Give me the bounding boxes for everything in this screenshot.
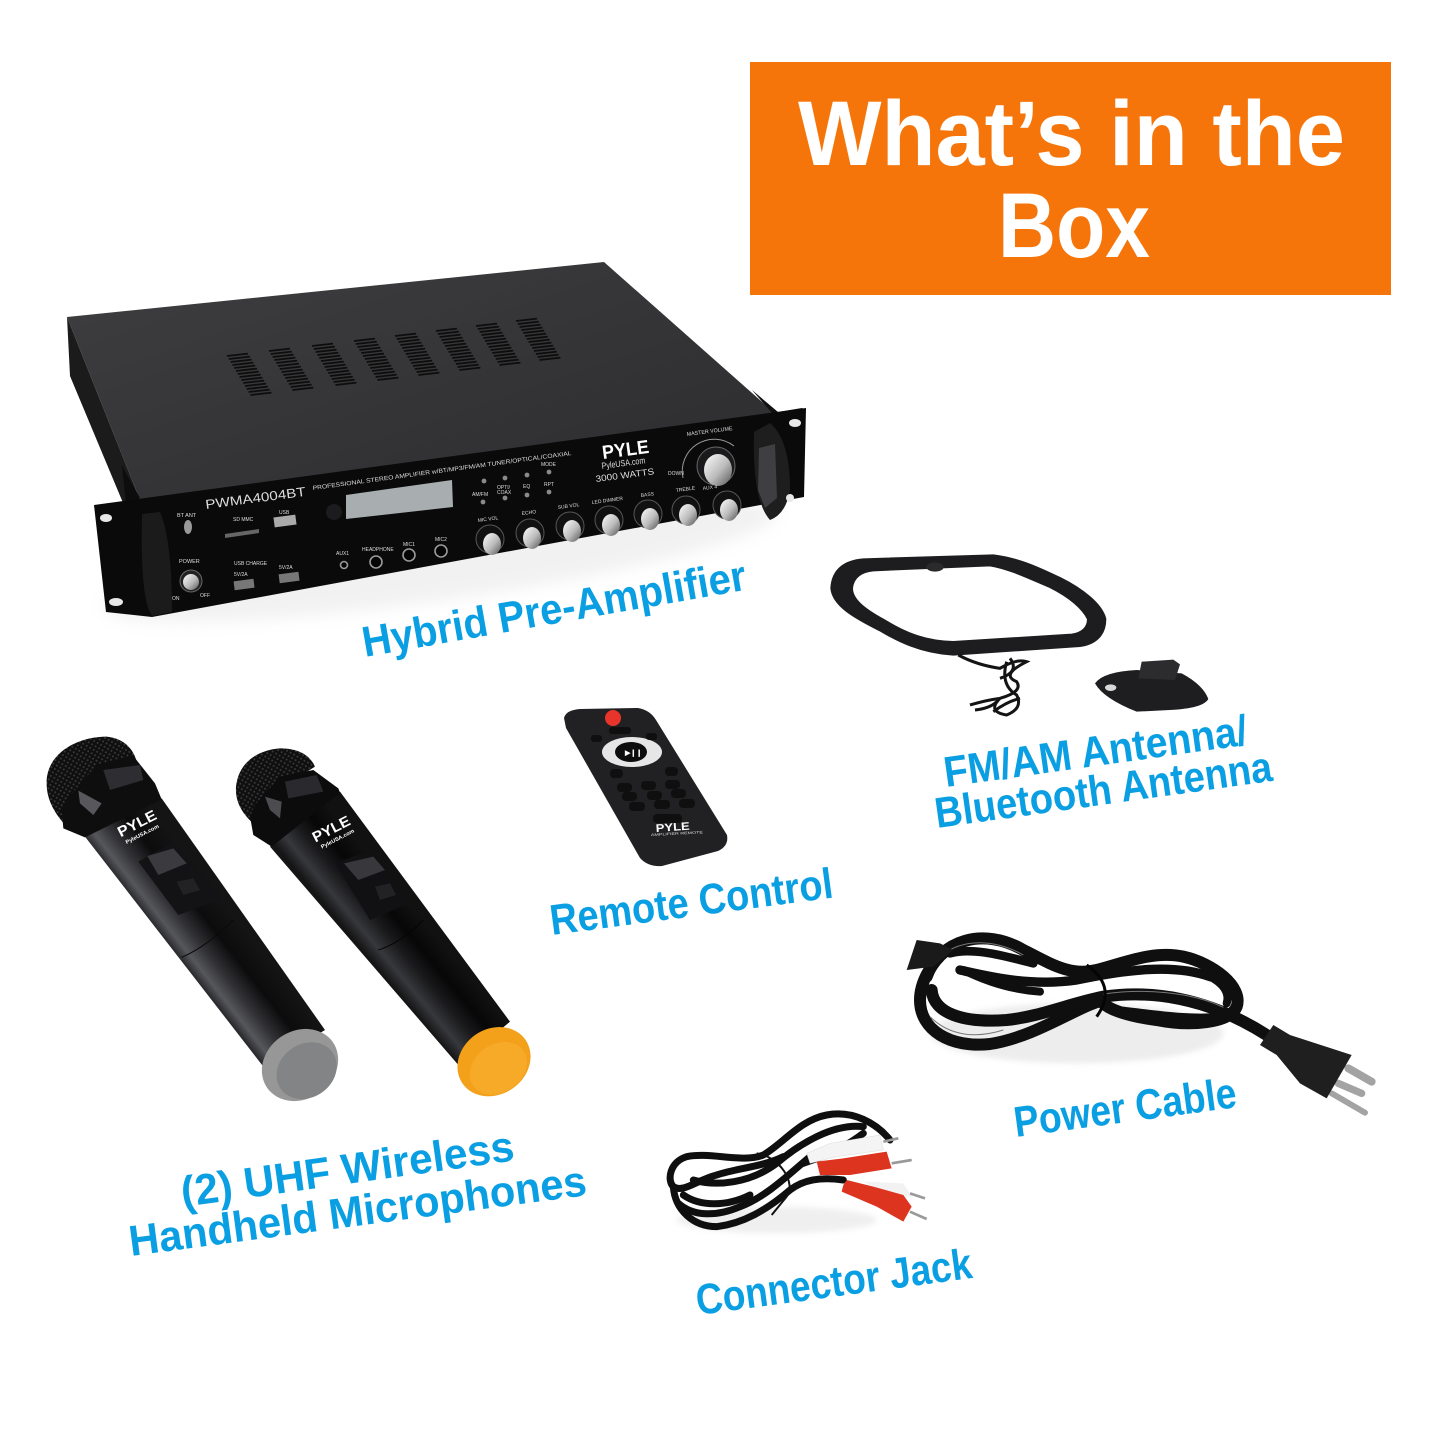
top vents (227, 319, 560, 395)
cable tie (1087, 965, 1105, 1017)
brand block (595, 437, 655, 484)
white plugs (807, 1135, 925, 1198)
power switch (172, 559, 210, 602)
mode buttons: EQ (523, 484, 530, 490)
usb and sd ports: SD MMC (233, 517, 254, 523)
mic logo: PyleUSA.com (320, 828, 356, 850)
female connector (907, 940, 953, 970)
master volume knob: MASTER VOLUME (686, 426, 733, 438)
knob labels: ECHO (521, 509, 537, 517)
remote logo (651, 821, 704, 837)
label: antenna: FM/AM Antenna/ (941, 707, 1250, 797)
antenna clip (926, 562, 944, 572)
title text (798, 83, 1345, 277)
power button (605, 710, 621, 726)
label: antenna: Bluetooth Antenna (932, 743, 1276, 838)
title text: Box (998, 175, 1150, 277)
cable highlights (930, 943, 1223, 1035)
title banner (750, 62, 1391, 295)
usb and sd ports (225, 510, 300, 590)
input jacks (336, 537, 447, 568)
front panel (94, 408, 806, 617)
mode buttons: AM/FM (472, 492, 488, 498)
mode buttons: MODE (541, 462, 557, 468)
knob labels: TREBLE (675, 485, 696, 494)
power switch: POWER (179, 559, 200, 565)
brand block: PyleUSA.com (601, 455, 646, 471)
label: remote: Remote Control (547, 860, 836, 945)
IR sensor (326, 504, 342, 520)
red plugs (817, 1152, 927, 1222)
mic seam (378, 920, 423, 950)
knob labels: MIC VOL (477, 515, 499, 524)
title text: What’s in the (798, 83, 1345, 185)
mic logo: PYLE (115, 808, 160, 841)
cable tie (757, 1153, 790, 1215)
brand block: 3000 WATTS (595, 466, 655, 484)
knob labels: BASS (640, 491, 655, 499)
rack handles (142, 423, 790, 616)
mic grille (47, 737, 137, 827)
input jacks: HEADPHONE (362, 547, 394, 553)
usb and sd ports: 5V/2A (234, 572, 248, 578)
model name: PWMA4004BT (204, 484, 307, 512)
mode buttons (472, 462, 557, 504)
usb and sd ports: USB (279, 510, 290, 516)
power cable (907, 938, 1372, 1113)
label: microphones: Handheld Microphones (126, 1157, 589, 1266)
brand block: PYLE (601, 437, 650, 464)
tone knobs (476, 491, 741, 555)
connector jack (670, 1114, 927, 1233)
remote logo: AMPLIFIER REMOTE (651, 830, 704, 837)
antenna loop (832, 556, 1105, 654)
label: connector jack: Connector Jack (693, 1240, 975, 1325)
mic switch (138, 842, 223, 915)
rca cable coils (670, 1114, 890, 1227)
label: microphones: (2) UHF Wireless (178, 1123, 517, 1217)
remote body (564, 708, 727, 866)
mic switch (335, 850, 408, 920)
nav ring: ▶❙❙ (624, 749, 642, 757)
mode buttons: OPTI/ (497, 485, 511, 491)
usb and sd ports: USB CHARGE (234, 561, 268, 567)
mic logo: PyleUSA.com (125, 824, 160, 846)
amplifier chassis (67, 262, 806, 510)
mic collar (250, 770, 340, 847)
mic grip (270, 792, 510, 1065)
mic collar (62, 756, 162, 837)
mode buttons: RPT (544, 482, 554, 488)
plug prongs (1332, 1068, 1372, 1113)
amplifier (67, 262, 806, 647)
bluetooth antenna port (177, 513, 197, 534)
antenna wire (958, 655, 1027, 715)
rack ear holes (100, 419, 801, 606)
power switch: ON (172, 596, 180, 602)
cable coils (920, 938, 1267, 1045)
description: PROFESSIONAL STEREO AMPLIFIER w/BT/MP3/FM/AM TUNER/OPTICAL/COAXIAL (312, 451, 573, 492)
knob labels: LED DIMMER (591, 496, 624, 506)
mic end cap (444, 1013, 544, 1110)
label: pre-amplifier: Hybrid Pre-Amplifier (358, 552, 750, 667)
microphone left (47, 737, 352, 1116)
input jacks: AUX1 (336, 551, 349, 557)
antenna (832, 556, 1208, 715)
antenna stand (1095, 660, 1208, 712)
master volume knob: DOWN (668, 471, 684, 477)
plug body (1260, 1025, 1352, 1098)
power switch: OFF (200, 593, 210, 599)
mic logo: PYLE (310, 813, 354, 846)
knob labels: AUX 4 (702, 484, 718, 492)
mic end cap (248, 1014, 352, 1116)
mic seam (182, 920, 233, 957)
bluetooth antenna port: BT ANT (177, 513, 197, 519)
master volume knob (668, 426, 735, 486)
remote buttons (591, 727, 695, 823)
microphone right (236, 748, 544, 1110)
mic grip (85, 798, 325, 1067)
knob labels: SUB VOL (557, 502, 580, 511)
label: power cable: Power Cable (1011, 1069, 1239, 1147)
usb and sd ports: 5V/2A (279, 565, 293, 571)
input jacks: MIC1 (403, 542, 415, 548)
remote control (564, 708, 727, 866)
input jacks: MIC2 (435, 537, 447, 543)
knob labels (477, 484, 718, 524)
mode buttons: COAX (497, 490, 512, 496)
remote logo: PYLE (655, 821, 690, 835)
mic grille (236, 748, 315, 827)
nav ring (602, 737, 662, 767)
display (346, 480, 453, 519)
